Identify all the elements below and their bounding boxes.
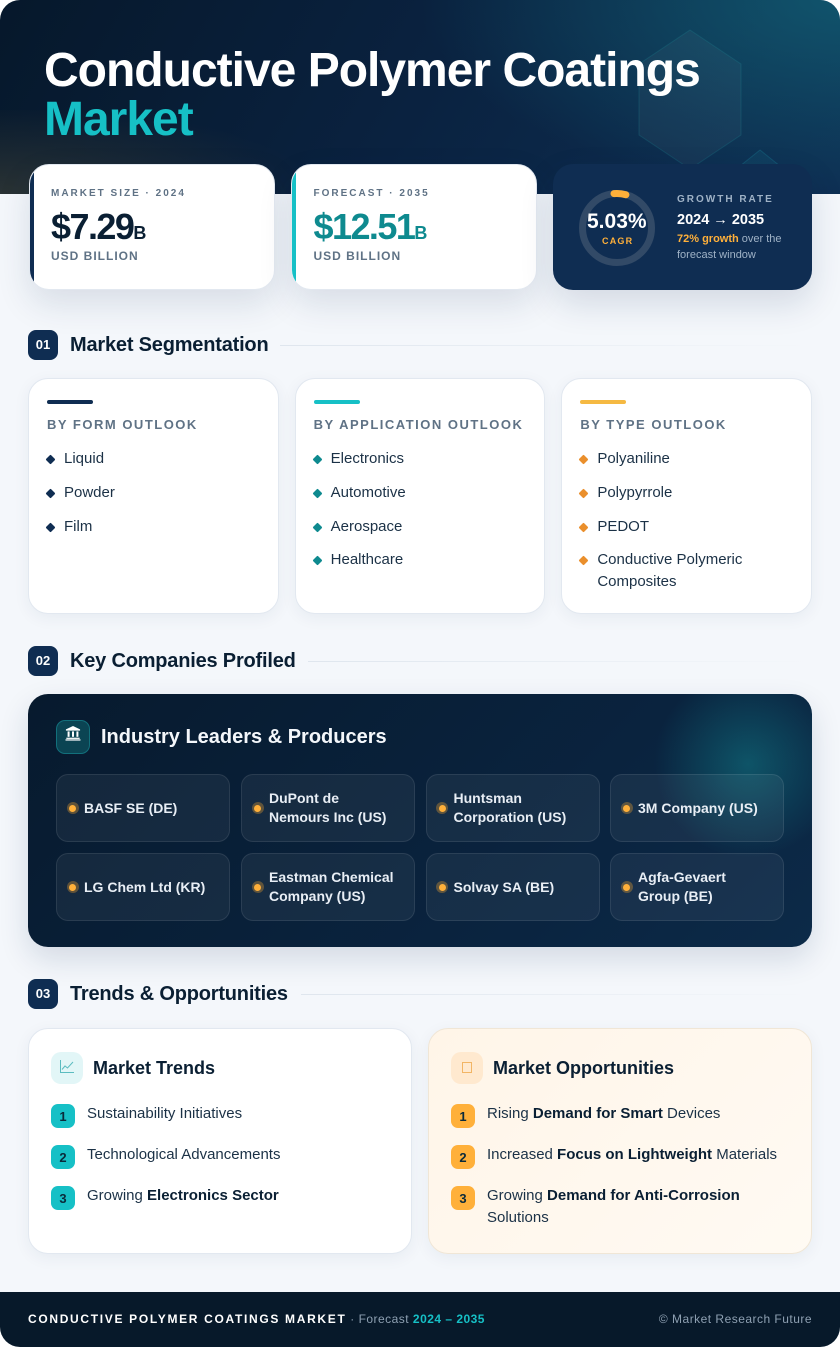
- panel: market trends: Sustainability Initiatives: [87, 1105, 242, 1122]
- company: Agfa: Agfa-Gevaert: [638, 869, 726, 885]
- company: LG Chem: LG Chem Ltd (KR): [84, 878, 205, 894]
- section 03 heading: 03: [36, 986, 50, 1001]
- trend 1: 1: [59, 1109, 67, 1124]
- trend 3: 3: [59, 1191, 67, 1206]
- opportunity 1: [451, 1104, 475, 1128]
- panel: by form outlook: [28, 378, 279, 614]
- company: Solvay: Solvay SA (BE): [454, 878, 554, 894]
- CAGR value: 5.03%: [587, 210, 647, 233]
- panel: by application outlook: BY APPLICATION OUTLOOK: [314, 417, 523, 432]
- panel: by form outlook: Film: [64, 518, 92, 535]
- company: Huntsman: [426, 774, 600, 842]
- company: Agfa: [610, 853, 784, 921]
- footer title: CONDUCTIVE POLYMER COATINGS MARKET · Forecast 2024 – 2035: [28, 1312, 485, 1326]
- opportunity 1: 1: [459, 1109, 467, 1124]
- stat card: forecast 2035: USD BILLION: [314, 249, 401, 263]
- panel: market opportunities: Increased Focus on Lightweight Materials: [487, 1146, 777, 1163]
- panel: by type outlook: BY TYPE OUTLOOK: [580, 417, 727, 432]
- stat card: growth rate: [553, 164, 812, 290]
- panel: by form outlook: Powder: [64, 484, 115, 501]
- icon: bank: [56, 720, 90, 754]
- panel: industry leaders: [28, 694, 812, 947]
- title: Market: [44, 93, 193, 146]
- section 02 heading: Key Companies Profiled: [70, 650, 296, 672]
- section 03 heading: [28, 979, 614, 1009]
- title: [44, 44, 700, 146]
- panel: market opportunities: Growing Demand for Anti-Corrosion: [487, 1187, 740, 1204]
- panel: by type outlook: PEDOT: [597, 518, 649, 535]
- panel: by type outlook: Polyaniline: [597, 450, 670, 467]
- company: DuPont: Nemours Inc (US): [269, 809, 386, 825]
- growth note: [677, 233, 782, 261]
- panel heading: Industry Leaders & Producers: [101, 726, 387, 748]
- stat card: market size 2024: USD BILLION: [51, 249, 139, 263]
- stat card: market size 2024: [29, 164, 274, 290]
- growth note: 72% growth over the: [677, 233, 782, 245]
- panel: by form outlook: Liquid: [64, 450, 104, 467]
- company: Agfa: Group (BE): [638, 888, 713, 904]
- title: Conductive Polymer Coatings: [44, 44, 700, 97]
- card heading: Market Opportunities: [493, 1058, 674, 1078]
- panel: by application outlook: Automotive: [331, 484, 406, 501]
- panel: by application outlook: Electronics: [331, 450, 404, 467]
- stat card: forecast 2035: FORECAST · 2035: [314, 188, 430, 199]
- icon: placeholder box: [451, 1052, 483, 1084]
- company: LG Chem: [56, 853, 230, 921]
- footer: [0, 1292, 840, 1347]
- section 03 heading: Trends & Opportunities: [70, 983, 288, 1005]
- company: DuPont: [241, 774, 415, 842]
- section 01 heading: 01: [36, 337, 50, 352]
- panel: by type outlook: [561, 378, 812, 614]
- panel: by application outlook: Aerospace: [331, 518, 402, 535]
- stat card: market size 2024: MARKET SIZE · 2024: [51, 188, 186, 199]
- panel: market opportunities: [428, 1028, 812, 1254]
- panel: market opportunities: Rising Demand for Smart Devices: [487, 1105, 720, 1122]
- panel: market opportunities: Solutions: [487, 1209, 549, 1226]
- panel: by type outlook: Polypyrrole: [597, 484, 672, 501]
- trend 2: 2: [59, 1150, 67, 1165]
- card heading: Market Trends: [93, 1058, 215, 1078]
- section 02 heading: [28, 646, 618, 676]
- company: 3M: 3M Company (US): [638, 800, 758, 816]
- growth rate label: GROWTH RATE: [677, 194, 774, 205]
- trend 3: [51, 1186, 75, 1210]
- opportunity 2: [451, 1145, 475, 1169]
- footer credit: © Market Research Future: [659, 1312, 812, 1326]
- panel: by form outlook: BY FORM OUTLOOK: [47, 417, 198, 432]
- company: Huntsman: Huntsman: [454, 790, 522, 806]
- header banner: [0, 0, 840, 194]
- panel: market trends: Growing Electronics Sector: [87, 1187, 279, 1204]
- stat card: market size 2024: $7.29B: [51, 206, 146, 247]
- icon: chart: [51, 1052, 83, 1084]
- CAGR label: CAGR: [602, 236, 633, 246]
- company: Eastman: Eastman Chemical: [269, 869, 394, 885]
- company: Solvay: [426, 853, 600, 921]
- company: Eastman: [241, 853, 415, 921]
- trend 1: [51, 1104, 75, 1128]
- company: Eastman: Company (US): [269, 888, 365, 904]
- CAGR ring: [579, 190, 655, 266]
- panel: market trends: [28, 1028, 412, 1254]
- opportunity 3: [451, 1186, 475, 1210]
- opportunity 2: 2: [459, 1150, 467, 1165]
- company: Huntsman: Corporation (US): [454, 809, 566, 825]
- stat card: forecast 2035: $12.51B: [314, 206, 427, 247]
- section 01 heading: Market Segmentation: [70, 334, 268, 356]
- panel: by type outlook: Conductive Polymeric: [597, 551, 742, 568]
- panel: by application outlook: Healthcare: [331, 551, 403, 568]
- panel: market trends: Technological Advancements: [87, 1146, 280, 1163]
- company: DuPont: DuPont de: [269, 790, 339, 806]
- trend 2: [51, 1145, 75, 1169]
- growth note: forecast window: [677, 249, 756, 261]
- panel: by type outlook: Composites: [597, 573, 677, 590]
- company: BASF: BASF SE (DE): [84, 800, 177, 816]
- company: 3M: [610, 774, 784, 842]
- company: BASF: [56, 774, 230, 842]
- year range: 2024 → 2035: [677, 212, 764, 228]
- section 01 heading: [28, 330, 606, 360]
- panel: by application outlook: [295, 378, 545, 614]
- section 02 heading: 02: [36, 653, 50, 668]
- opportunity 3: 3: [459, 1191, 467, 1206]
- stat card: forecast 2035: [291, 164, 537, 290]
